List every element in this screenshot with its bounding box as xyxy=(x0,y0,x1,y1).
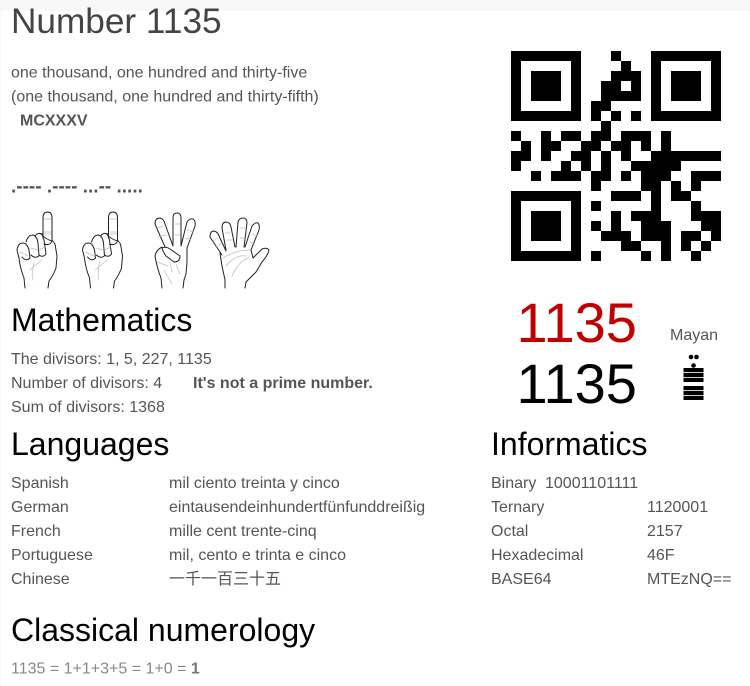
icon: hand one xyxy=(82,212,122,288)
mayan label: Mayan xyxy=(670,327,718,344)
icon: sign language hands xyxy=(17,212,269,288)
table: informatics: 10001101111 xyxy=(545,475,638,492)
table: languages: mil, cento e trinta e cinco xyxy=(169,547,346,564)
table: informatics: Ternary xyxy=(491,499,544,516)
table: languages: mille cent trente-cinq xyxy=(169,523,317,540)
table: informatics: 1120001 xyxy=(647,499,708,516)
large number red: 1135 xyxy=(516,291,637,354)
text block: number in words xyxy=(11,64,319,106)
table: languages: German xyxy=(11,499,69,516)
table: informatics: Octal xyxy=(491,523,528,540)
table: informatics: Hexadecimal xyxy=(491,547,583,564)
title: Number 1135 xyxy=(11,2,222,41)
table: informatics: Binary xyxy=(491,475,536,492)
text block: number in words: (one thousand, one hundred and thirty-fifth) xyxy=(11,88,319,106)
heading: classical numerology: Classical numerology xyxy=(11,612,315,648)
table: languages: Spanish xyxy=(11,475,69,492)
QR code xyxy=(511,51,721,261)
icon: mayan numeral xyxy=(684,355,704,400)
finder patterns xyxy=(511,51,721,261)
data modules xyxy=(511,51,721,261)
table: languages xyxy=(11,475,425,588)
table: informatics: BASE64 xyxy=(491,571,552,588)
table: languages: eintausendeinhundertfünfunddreißig xyxy=(169,499,425,516)
table: informatics: MTEzNQ== xyxy=(647,571,731,588)
table: languages: Portuguese xyxy=(11,547,93,564)
table: languages: French xyxy=(11,523,61,540)
text block: divisors xyxy=(11,351,373,416)
text block: divisors: It's not a prime number. xyxy=(193,375,373,392)
heading: mathematics: Mathematics xyxy=(11,302,192,338)
table: languages: 一千一百三十五 xyxy=(169,570,281,588)
large number black: 1135 xyxy=(516,352,637,415)
roman numeral: MCXXXV xyxy=(20,112,88,130)
text block: divisors: Number of divisors: 4 xyxy=(11,375,162,392)
icon: hand one xyxy=(17,212,57,288)
numerology calculation: 1135 = 1+1+3+5 = 1+0 = 1 xyxy=(11,660,200,678)
morse code: .---- .---- ...-- ..... xyxy=(11,176,143,198)
table: languages: mil ciento treinta y cinco xyxy=(169,475,340,492)
icon: hand five xyxy=(210,218,269,288)
heading: languages: Languages xyxy=(11,426,169,462)
heading: informatics: Informatics xyxy=(491,426,647,462)
table: informatics xyxy=(491,475,731,588)
table: languages: Chinese xyxy=(11,571,70,588)
text block: divisors: The divisors: 1, 5, 227, 1135 xyxy=(11,351,212,368)
text block: divisors: Sum of divisors: 1368 xyxy=(11,399,165,416)
text block: number in words: one thousand, one hundred and thirty-five xyxy=(11,64,307,82)
table: informatics: 2157 xyxy=(647,523,683,540)
icon: hand three xyxy=(155,213,195,288)
table: informatics: 46F xyxy=(647,547,675,564)
